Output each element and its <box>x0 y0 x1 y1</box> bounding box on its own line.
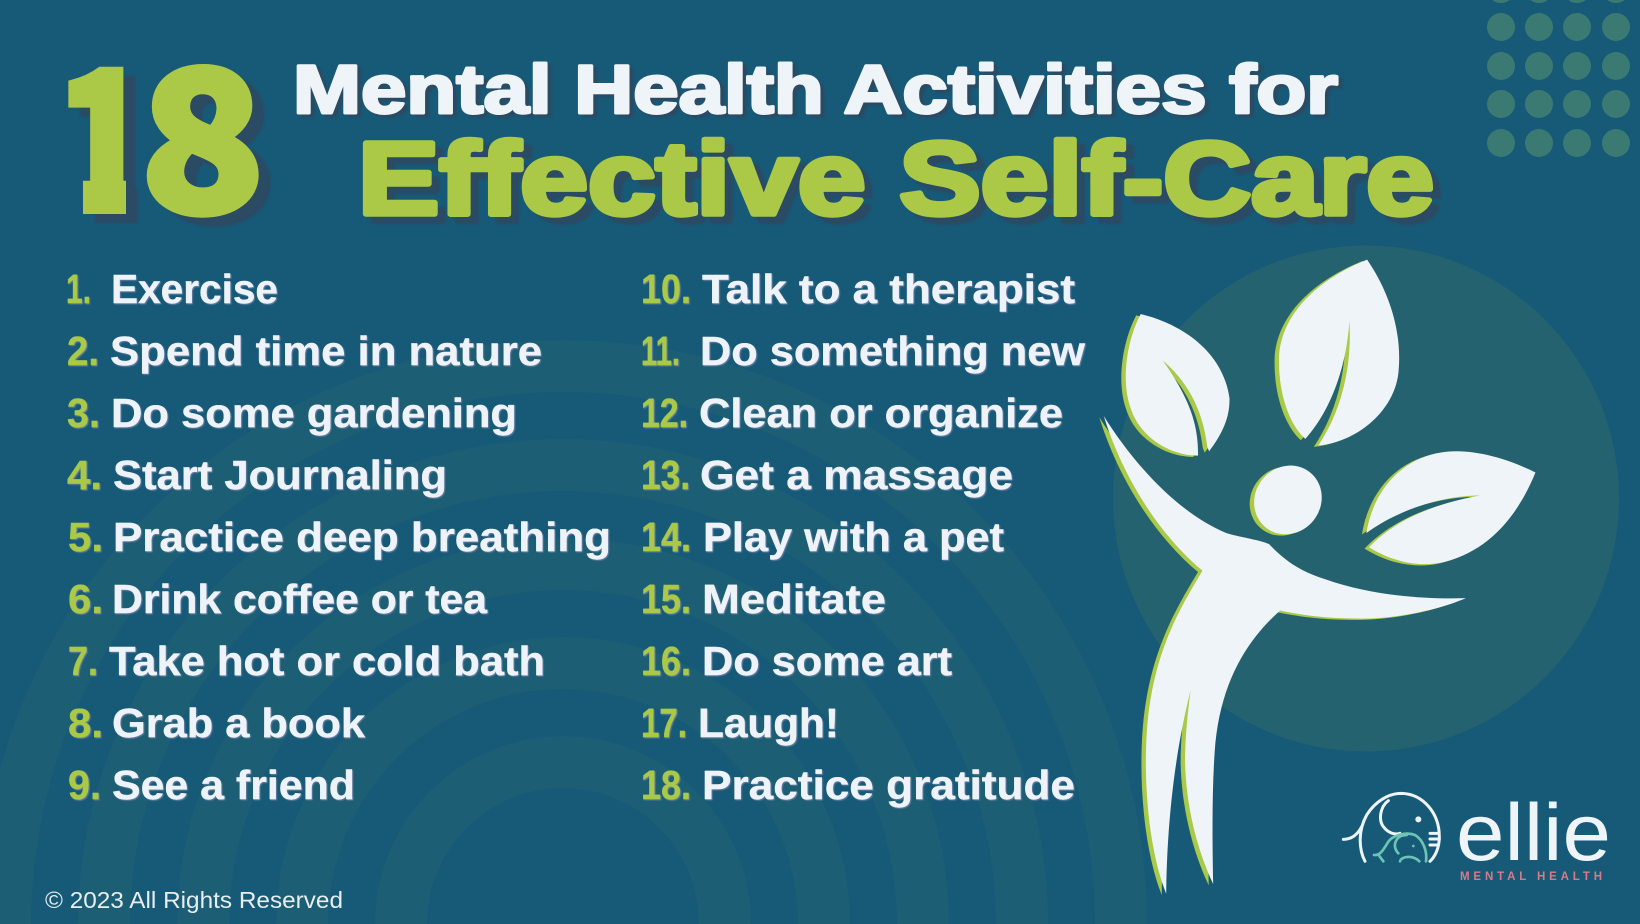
activity list column two: 15. <box>641 576 691 622</box>
activity list column one: 6. <box>68 576 103 622</box>
activity list column one: 4. <box>67 452 102 498</box>
activity list column one: Do some gardening <box>111 390 517 436</box>
activity list column two: 18. <box>641 762 691 808</box>
activity list column two: 12. <box>641 390 688 436</box>
activity list column two: Play with a pet <box>703 514 1004 560</box>
activity list column one: 2. <box>67 328 99 374</box>
activity list column two: Laugh! <box>698 700 839 746</box>
icon: person with leaves figure <box>1099 260 1535 895</box>
activity list column one: 3. <box>67 390 100 436</box>
activity list column one: 5. <box>68 514 103 560</box>
logo: ellie mental health <box>1343 788 1611 883</box>
activity list column two: Clean or organize <box>699 390 1063 436</box>
background concentric rings <box>0 340 1147 924</box>
activity list column two: 16. <box>641 638 691 684</box>
activity list column one: Take hot or cold bath <box>109 638 545 684</box>
title number 18 <box>68 64 271 227</box>
activity list column two: Do something new <box>700 328 1085 374</box>
activity list column one: Practice deep breathing <box>113 514 611 560</box>
copyright: © 2023 All Rights Reserved <box>45 887 343 913</box>
activity list column one: 7. <box>68 638 98 684</box>
icon: elephant logo <box>1343 793 1439 861</box>
activity list column one: See a friend <box>112 762 355 808</box>
dot grid decoration <box>1487 0 1630 157</box>
activity list column two <box>641 266 1085 808</box>
activity list column two: Do some art <box>702 638 952 684</box>
activity list column one: 1. <box>66 266 91 312</box>
activity list column one: 8. <box>68 700 103 746</box>
activity list column two: 17. <box>641 700 687 746</box>
activity list column two: 13. <box>641 452 690 498</box>
activity list column one: 9. <box>68 762 101 808</box>
wordmark: ellie <box>1456 788 1611 878</box>
activity list column two: 11. <box>641 328 680 374</box>
activity list column one: Spend time in nature <box>110 328 542 374</box>
activity list column two: Practice gratitude <box>702 762 1075 808</box>
title line one: Mental Health Activities for <box>293 51 1338 128</box>
activity list column two: Meditate <box>702 576 886 622</box>
activity list column two: Talk to a therapist <box>702 266 1075 312</box>
activity list column one: Grab a book <box>112 700 365 746</box>
activity list column one <box>66 266 611 808</box>
activity list column one: Drink coffee or tea <box>112 576 488 622</box>
title line two: Effective Self-Care <box>358 121 1434 236</box>
tagline: MENTAL HEALTH <box>1460 871 1602 883</box>
activity list column two: 14. <box>641 514 691 560</box>
activity list column two: Get a massage <box>700 452 1013 498</box>
activity list column one: Exercise <box>111 266 278 312</box>
background circle behind figure <box>1113 246 1619 752</box>
activity list column two: 10. <box>641 266 691 312</box>
activity list column one: Start Journaling <box>113 452 447 498</box>
